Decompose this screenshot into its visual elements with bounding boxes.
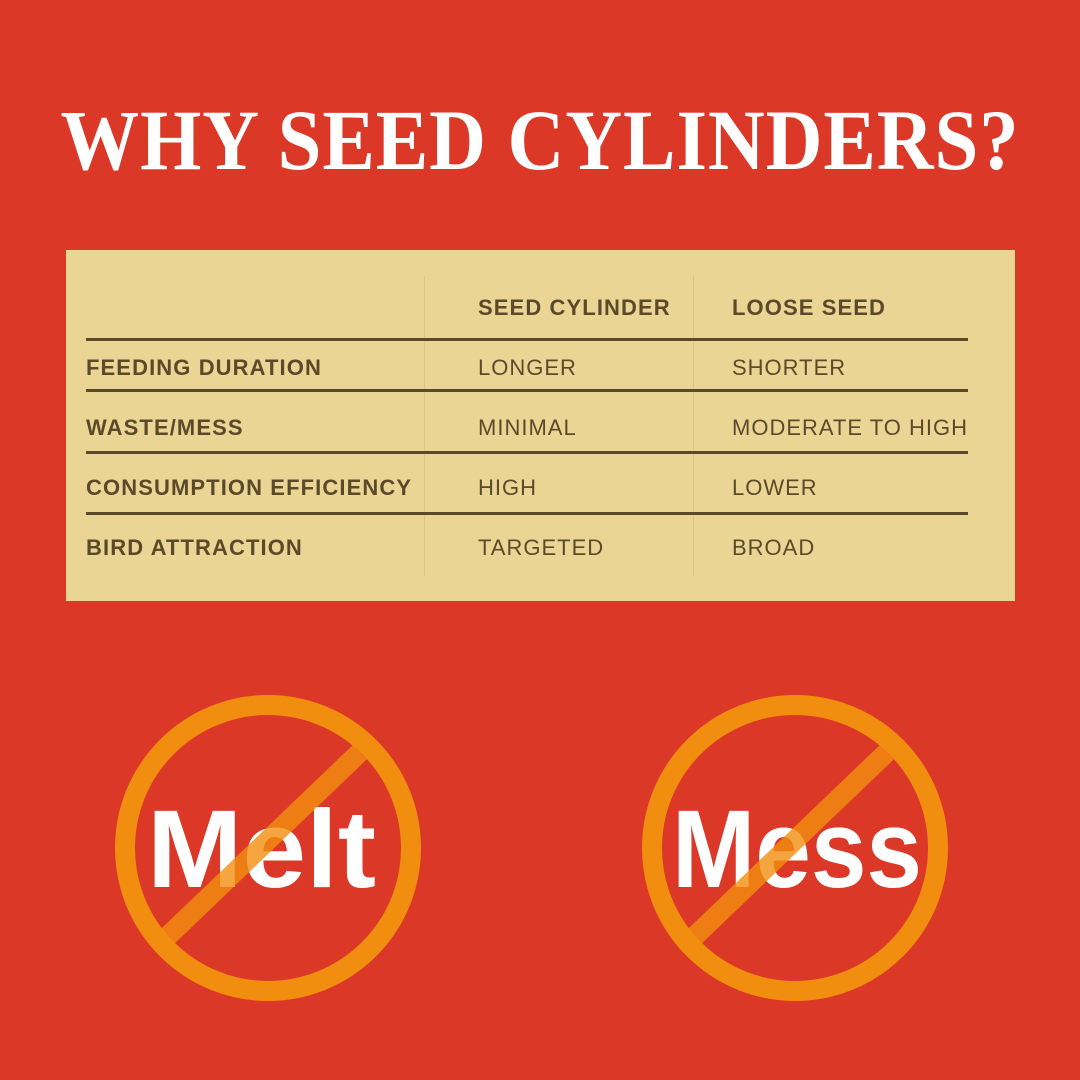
panel: comparison table: MINIMAL [478,415,577,440]
icon: no melt: Melt [147,788,376,911]
panel: comparison table [66,250,1015,601]
panel: comparison table: MODERATE TO HIGH [732,415,968,440]
row: waste/mess: WASTE/MESS [86,415,244,440]
title: WHY SEED CYLINDERS? [61,92,1019,188]
panel: comparison table: HIGH [478,475,537,500]
row: bird attraction: BIRD ATTRACTION [86,535,303,560]
panel: comparison table: TARGETED [478,535,604,560]
icon: no mess [652,705,938,991]
icon: no melt [125,705,411,991]
panel: comparison table: LOWER [732,475,818,500]
panel: comparison table: LONGER [478,355,577,380]
header: loose seed: LOOSE SEED [732,295,886,320]
row: feeding duration: FEEDING DURATION [86,355,322,380]
panel: comparison table: SHORTER [732,355,846,380]
row: consumption efficiency: CONSUMPTION EFFICIENCY [86,475,412,500]
header: seed cylinder: SEED CYLINDER [478,295,671,320]
icon: no mess: Mess [672,788,922,911]
panel: comparison table: BROAD [732,535,815,560]
